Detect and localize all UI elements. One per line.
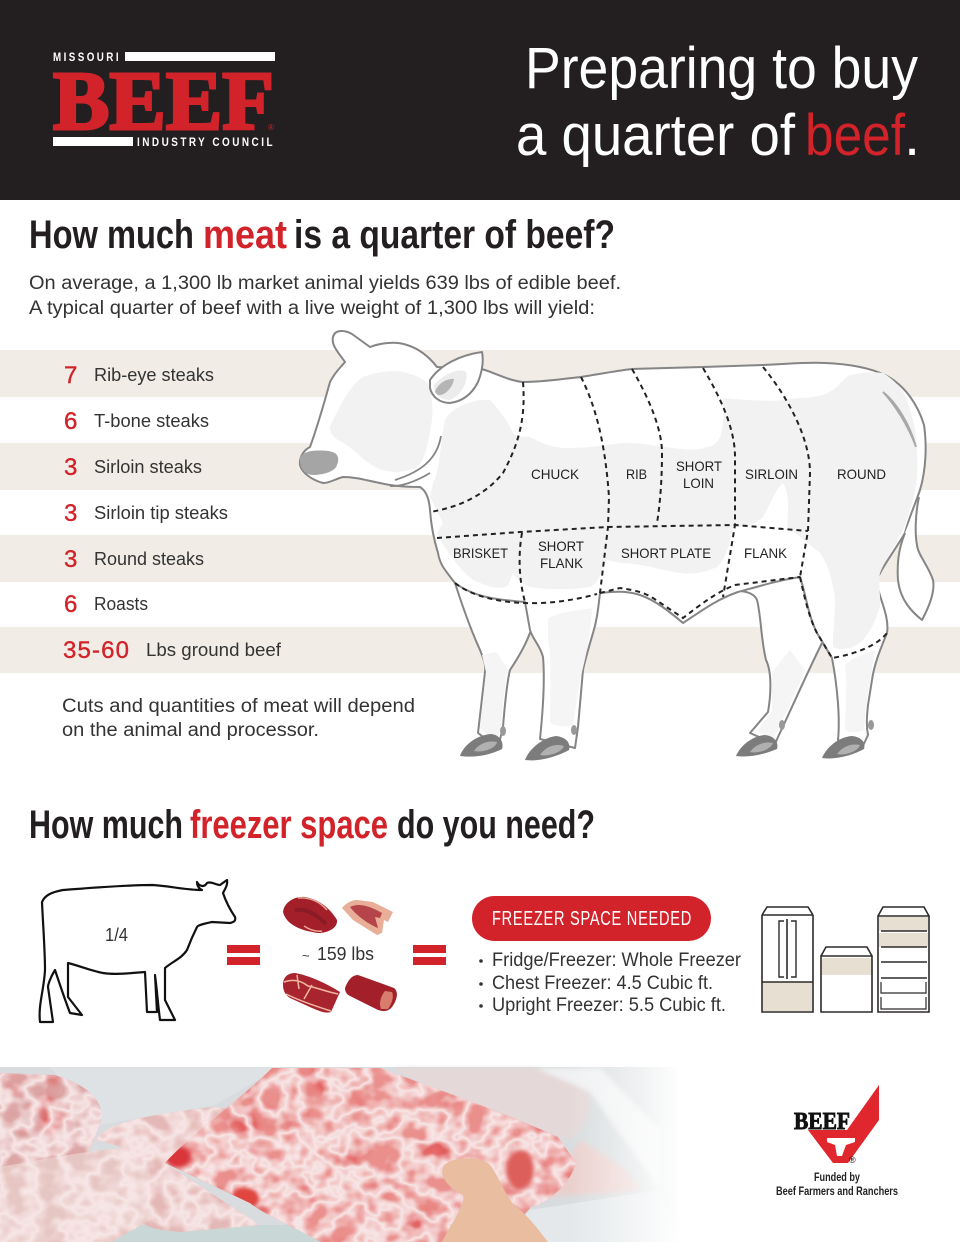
- row: ground beef: [63, 637, 282, 664]
- background stripes: [0, 350, 960, 673]
- heading: how much meat: meat: [203, 213, 287, 257]
- panel: freezer space needed: [472, 896, 742, 1016]
- head lines: [390, 436, 441, 486]
- icon: cuts of meat with weight: [283, 897, 397, 1013]
- tail: [883, 392, 933, 620]
- row: round: 3: [64, 546, 77, 573]
- icon: cow outline with 1/4 label: 1/4: [105, 925, 128, 945]
- heading: how much meat: How much: [29, 213, 194, 257]
- row: roasts: 6: [64, 591, 77, 618]
- row: rib-eye: Rib-eye steaks: [94, 365, 214, 385]
- panel: header band: [0, 0, 960, 200]
- nose: [300, 451, 338, 475]
- row: roasts: [64, 591, 148, 618]
- row: roasts: Roasts: [94, 594, 148, 614]
- background bags: [393, 1068, 660, 1198]
- cut labels: LOIN: [683, 475, 714, 491]
- cut labels: BRISKET: [453, 545, 508, 561]
- photo: frozen ground beef in freezer: [0, 1060, 682, 1242]
- title: [516, 36, 920, 168]
- row: rib-eye: [64, 362, 214, 389]
- title: .: [904, 103, 920, 168]
- logo: Missouri Beef Industry Council: MISSOURI: [53, 50, 121, 64]
- hand: [442, 1158, 548, 1242]
- cut labels: ROUND: [837, 466, 886, 482]
- freezer list: [479, 950, 742, 1016]
- steak 1: [283, 897, 337, 933]
- heading: how much meat: [29, 213, 615, 257]
- weight label: 159 lbs: [317, 944, 374, 964]
- row: ground beef: Lbs ground beef: [146, 640, 282, 660]
- heading: freezer space: How much: [29, 803, 183, 847]
- row: sirloin tip: [64, 500, 228, 527]
- cut labels: RIB: [626, 466, 647, 482]
- note text: Cuts and quantities of meat will depend: [62, 696, 415, 717]
- steak 2: [342, 900, 393, 935]
- icon: equals sign: [413, 945, 446, 965]
- row: sirloin: 3: [64, 454, 77, 481]
- far front leg shading: [480, 652, 508, 742]
- icon: cow outline with 1/4 label: [40, 880, 235, 1022]
- row: round: Round steaks: [94, 549, 204, 569]
- heading: freezer space: do you need?: [397, 803, 595, 847]
- roast 2: [345, 975, 397, 1011]
- cut labels: FLANK: [540, 555, 584, 571]
- funded by text: [776, 1172, 898, 1198]
- logo: Beef check mark: [794, 1085, 879, 1165]
- logo: Missouri Beef Industry Council: BEEF: [53, 55, 274, 148]
- icon: fridge freezer: [762, 907, 813, 1012]
- row: sirloin: Sirloin steaks: [94, 457, 202, 477]
- diagram: beef cuts cow: [300, 331, 933, 760]
- roast 1: [283, 973, 340, 1013]
- note text: [62, 696, 415, 741]
- logo: Missouri Beef Industry Council: ®: [268, 123, 274, 132]
- intro text: On average, a 1,300 lb market animal yields 639 lbs of edible beef.: [29, 273, 621, 294]
- fade to white: [570, 1060, 682, 1242]
- cut labels: SHORT PLATE: [621, 545, 711, 561]
- icon: equals sign: [227, 945, 260, 965]
- hooves: [460, 720, 874, 760]
- far leg outlines: [455, 583, 822, 748]
- row: rib-eye: 7: [64, 362, 77, 389]
- main bag of beef: [160, 1067, 580, 1242]
- cut labels: [453, 458, 886, 571]
- funded by text: Funded by: [814, 1172, 860, 1184]
- logo: Beef check mark: BEEF: [794, 1109, 850, 1135]
- cut labels: FLANK: [744, 545, 788, 561]
- header background: [0, 0, 960, 200]
- freezer list: Chest Freezer: 4.5 Cubic ft.: [492, 973, 713, 994]
- heading: how much meat: is a quarter of beef?: [294, 213, 615, 257]
- heading: freezer space: [29, 803, 595, 847]
- funded by text: Beef Farmers and Ranchers: [776, 1186, 898, 1198]
- far leg shading: [757, 650, 805, 739]
- ear: [430, 352, 483, 403]
- freezer list: Upright Freezer: 5.5 Cubic ft.: [492, 995, 726, 1016]
- cut labels: SHORT: [676, 458, 722, 474]
- title: Preparing to buy: [525, 36, 918, 101]
- logo: Beef check mark: ®: [849, 1155, 856, 1165]
- pill heading: FREEZER SPACE NEEDED: [492, 908, 692, 930]
- icon: chest freezer: [821, 947, 872, 1012]
- title: a quarter of: [516, 103, 796, 168]
- list: cuts and quantities: [63, 362, 282, 664]
- grey shading: [330, 371, 917, 732]
- row: t-bone: [64, 408, 209, 435]
- row: round: [64, 546, 204, 573]
- note text: on the animal and processor.: [62, 720, 319, 741]
- weight label: ~: [302, 948, 310, 963]
- row: t-bone: T-bone steaks: [94, 411, 209, 431]
- intro text: A typical quarter of beef with a live weight of 1,300 lbs will yield:: [29, 298, 595, 319]
- title: beef: [805, 103, 906, 168]
- freezer list: Fridge/Freezer: Whole Freezer: [492, 950, 742, 971]
- left bags: [0, 1073, 102, 1167]
- freezer interior: [0, 1067, 680, 1242]
- pill heading: [472, 896, 711, 941]
- row: sirloin: [64, 454, 202, 481]
- row: sirloin tip: 3: [64, 500, 77, 527]
- body outline: [300, 331, 926, 748]
- row: ground beef: 35-60: [63, 637, 129, 664]
- cut labels: SHORT: [538, 538, 584, 554]
- icon: upright freezer: [878, 907, 929, 1012]
- dashed cut lines: [430, 367, 887, 658]
- logo: Missouri Beef Industry Council: INDUSTRY COUNCIL: [137, 135, 275, 149]
- cut labels: SIRLOIN: [745, 466, 798, 482]
- far leg fills: [455, 577, 822, 748]
- cut labels: CHUCK: [531, 466, 580, 482]
- heading: freezer space: freezer space: [190, 803, 388, 847]
- row: t-bone: 6: [64, 408, 77, 435]
- intro text: [29, 273, 621, 319]
- row: sirloin tip: Sirloin tip steaks: [94, 503, 228, 523]
